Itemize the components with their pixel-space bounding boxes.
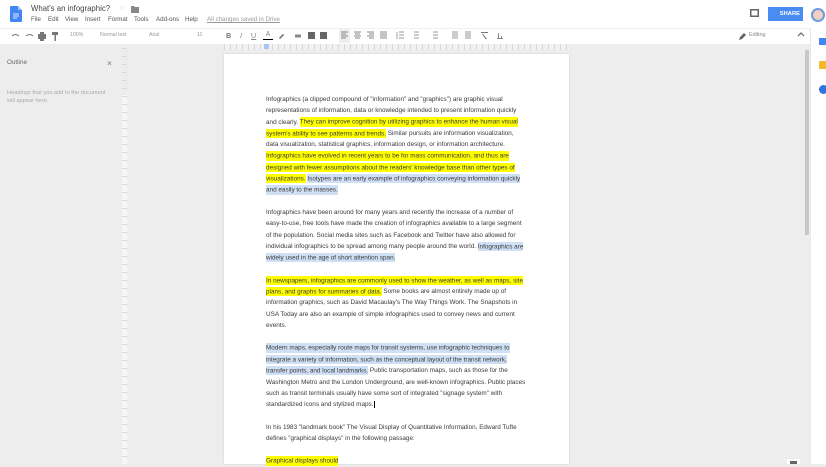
font dropdown: Arial bbox=[149, 32, 159, 38]
menu bar: Help bbox=[185, 16, 198, 23]
document text: Washington Metro and the London Underground, are well-known infographics. Public places bbox=[266, 378, 525, 386]
top header bar bbox=[0, 0, 826, 28]
menu bar: Tools bbox=[134, 16, 148, 23]
document text: standardized icons and stylized maps. bbox=[266, 401, 373, 408]
document text: visualizations. Isotypes are an early example of infographics conveying information quickly bbox=[266, 175, 520, 182]
icon: collapse chevron bbox=[798, 32, 804, 36]
document text: plans, and graphs for summaries of data. Some books are almost entirely made up of bbox=[266, 288, 506, 295]
menu bar: Format bbox=[108, 16, 128, 23]
scrollbar bbox=[805, 50, 809, 235]
explore button bbox=[787, 459, 800, 464]
icon: pencil bbox=[739, 33, 746, 40]
document text: and easily to the masses. bbox=[266, 186, 338, 193]
document text: individual infographics to be spread among many people around the world. Infographics are bbox=[266, 243, 523, 250]
vertical ruler top margin bbox=[122, 48, 127, 95]
document text: USA Today are also an example of simple infographics used to convey news and current bbox=[266, 311, 515, 318]
document text: data visualization, statistical graphics, information design, or information architecture. bbox=[266, 141, 505, 148]
text colour: A bbox=[266, 31, 270, 38]
outline placeholder: will appear here. bbox=[7, 98, 48, 104]
avatar bbox=[811, 8, 825, 22]
document text: representations of information, data or knowledge intended to present information quickly bbox=[266, 107, 516, 114]
document text: of the population. Social media sites such as Facebook and Twitter have also allowed for bbox=[266, 232, 515, 239]
bold: B bbox=[226, 31, 231, 40]
underline: U bbox=[251, 31, 256, 40]
document text: In newspapers, infographics are commonly used to show the weather, as well as maps, site bbox=[266, 277, 523, 284]
document text: defines "graphical displays" in the following passage: bbox=[266, 435, 415, 442]
text colour bbox=[263, 31, 273, 40]
document text: Infographics have been around for many years and recently the increase of a number of bbox=[266, 209, 513, 216]
menu bar: All changes saved in Drive bbox=[207, 16, 280, 23]
document text: widely used in the age of short attention span. bbox=[266, 254, 395, 261]
document text: designed with fewer assumptions about the readers' knowledge base than other types of bbox=[266, 164, 515, 171]
document text: In his 1983 "landmark book" The Visual Display of Quantitative Information, Edward Tufte bbox=[266, 424, 517, 431]
toolbar bbox=[0, 28, 826, 44]
menu bar: Edit bbox=[48, 16, 59, 23]
outline heading: Outline bbox=[7, 59, 27, 66]
menu bar: File bbox=[31, 16, 41, 23]
menu bar bbox=[31, 16, 280, 23]
mode selector: Editing bbox=[749, 32, 765, 38]
icon: star: ☆ bbox=[119, 5, 125, 12]
document text: events. bbox=[266, 322, 287, 329]
icon: calendar bbox=[819, 38, 826, 45]
panel: right side rail bbox=[810, 28, 826, 464]
document text: information graphics, such as David Macaulay's The Way Things Work. The Snapshots in bbox=[266, 299, 517, 306]
document text: integrate a variety of information, such as the conceptual layout of the transit network, bbox=[266, 356, 507, 363]
panel: outline sidebar bbox=[7, 58, 112, 104]
menu bar: Insert bbox=[85, 16, 100, 23]
icon: comments bbox=[750, 9, 759, 17]
menu bar: View bbox=[65, 16, 78, 23]
icon: keep note bbox=[819, 61, 826, 69]
icon: docs logo bbox=[10, 6, 22, 22]
outline placeholder bbox=[7, 90, 106, 104]
share button: SHARE bbox=[780, 11, 800, 17]
outline placeholder: Headings that you add to the document bbox=[7, 90, 105, 96]
panel: document page bbox=[224, 54, 569, 464]
zoom dropdown: 100% bbox=[70, 32, 83, 38]
document title: What's an infographic? bbox=[31, 4, 110, 13]
formatting icons bbox=[279, 29, 503, 43]
document text: easy-to-use, free tools have made the creation of infographics available to a large segment bbox=[266, 220, 522, 227]
size dropdown: 11 bbox=[197, 32, 202, 38]
document text: system's ability to see patterns and trends. Similar pursuits are information visualization, bbox=[266, 130, 514, 137]
document text: Graphical displays should bbox=[266, 458, 338, 465]
ruler indent marker bbox=[264, 44, 269, 49]
share button bbox=[768, 7, 803, 21]
document text: Modern maps, especially route maps for transit systems, use infographic techniques to bbox=[266, 345, 510, 352]
document text: and clearly. They can improve cognition by utilizing graphics to enhance the human visual bbox=[266, 119, 518, 126]
vertical ruler bbox=[122, 48, 127, 464]
style dropdown: Normal text bbox=[100, 32, 127, 38]
italic: I bbox=[240, 31, 242, 40]
document text: such as transit terminals usually have some sort of integrated "signage system" with bbox=[266, 390, 502, 397]
document text: Infographics have evolved in recent years to be for mass communication, and thus are bbox=[266, 152, 509, 160]
document text: transfer points, and local landmarks. Public transportation maps, such as those for the bbox=[266, 367, 508, 374]
document text: Infographics (a clipped compound of "information" and "graphics") are graphic visual bbox=[266, 96, 503, 103]
icon: close: × bbox=[107, 58, 112, 68]
icon: folder bbox=[131, 6, 139, 13]
ruler bbox=[224, 44, 569, 50]
menu bar: Add-ons bbox=[156, 16, 179, 23]
toolbar icons: undo, redo, print, paint bbox=[12, 32, 58, 41]
icon: tasks bbox=[819, 85, 826, 94]
